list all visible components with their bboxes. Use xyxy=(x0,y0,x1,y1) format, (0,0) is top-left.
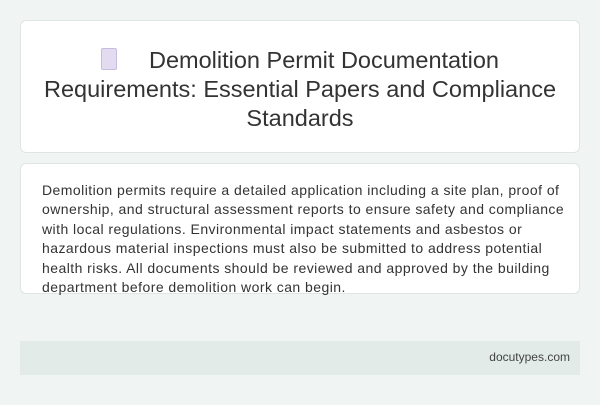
panel: description xyxy=(20,163,580,294)
footer xyxy=(20,341,580,375)
text block: department before demolition work can begin. xyxy=(42,279,346,295)
text block: health risks. All documents should be reviewed and approved by the building xyxy=(42,260,550,276)
title: Demolition Permit Documentation Requirements: Essential Papers and Compliance Standards xyxy=(44,47,556,131)
panel: title xyxy=(20,20,580,153)
text block: ownership, and structural assessment reports to ensure safety and compliance xyxy=(42,201,564,217)
text block: hazardous material inspections must also be submitted to address potential xyxy=(42,240,542,256)
footer text: docutypes.com xyxy=(489,350,570,364)
text block xyxy=(42,182,564,295)
text block: Demolition permits require a detailed application including a site plan, proof of xyxy=(42,182,559,198)
text block: with local regulations. Environmental impact statements and asbestos or xyxy=(42,221,522,237)
